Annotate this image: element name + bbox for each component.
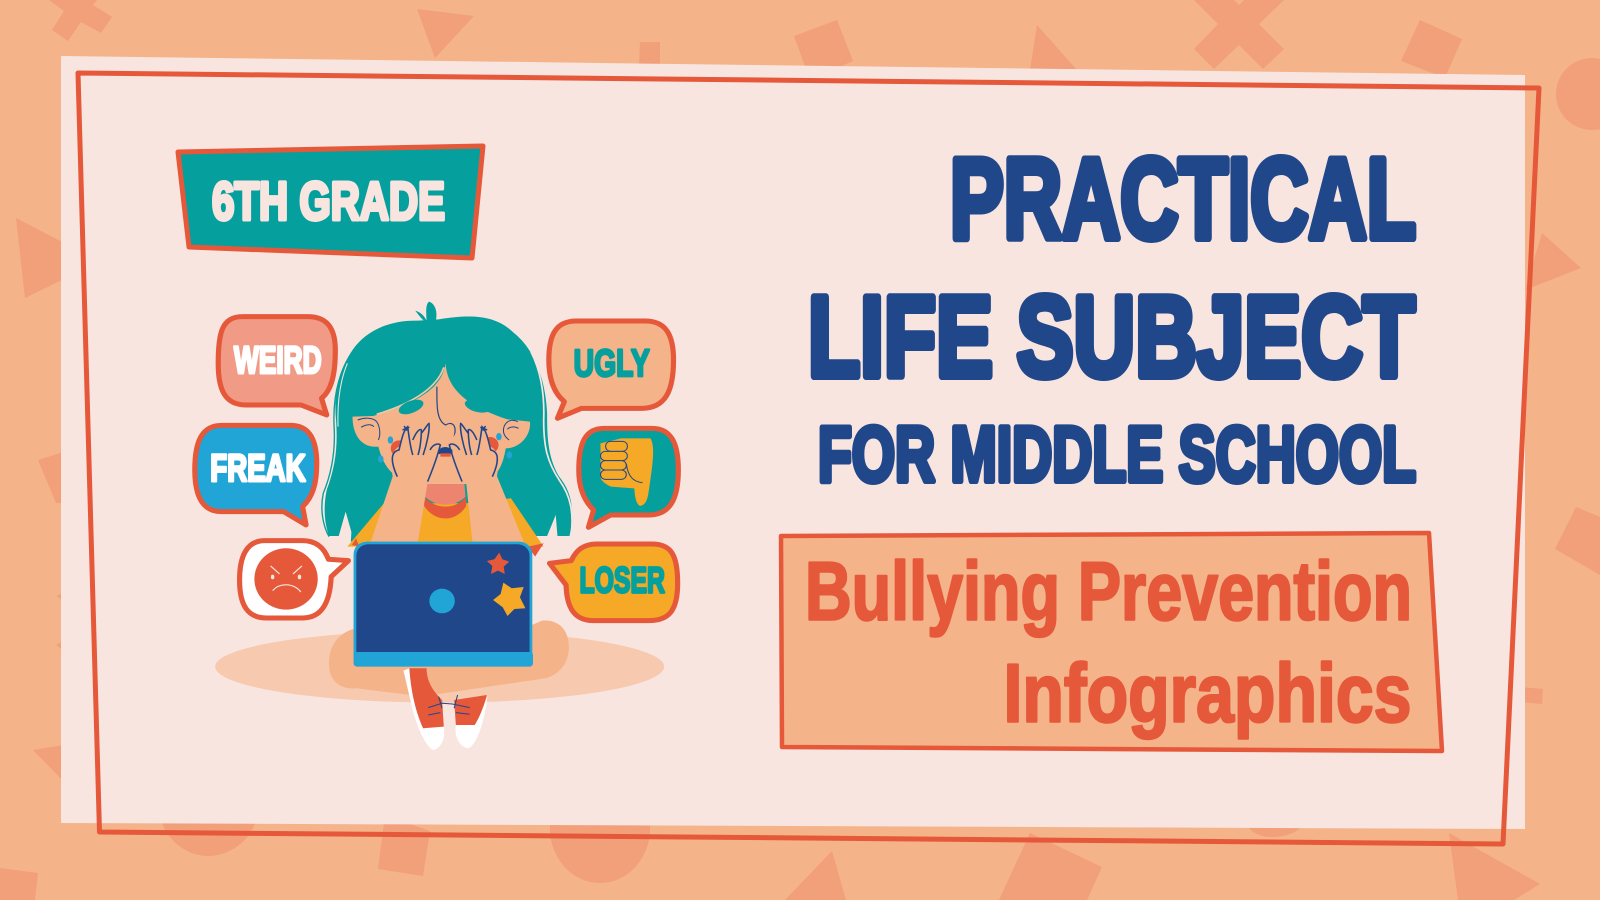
bubble: loser [550, 544, 678, 621]
cream panel [61, 56, 1525, 829]
bubble: ugly [549, 321, 674, 418]
face [353, 363, 530, 484]
subtitle box: Bullying Prevention [805, 544, 1412, 638]
bubble: freak: FREAK [210, 448, 306, 490]
grade badge: 6TH GRADE [212, 172, 445, 232]
collar [424, 484, 466, 518]
red sketch frame [78, 73, 1539, 844]
laptop [354, 542, 533, 667]
illustration: girl crying behind laptop with speech bubbles [195, 302, 678, 750]
arms [371, 475, 524, 542]
bubble: ugly: UGLY [574, 343, 650, 385]
title: practical life subject: PRACTICAL [950, 136, 1416, 263]
bubble: thumbs down [579, 428, 678, 527]
bubble: freak [195, 425, 317, 525]
subtitle box [781, 533, 1442, 751]
mouth [439, 447, 452, 457]
bubble: weird [218, 317, 335, 415]
icon: thumbs down [600, 438, 653, 506]
icon: angry face [254, 548, 318, 610]
bubble: angry face [240, 541, 348, 618]
right hand [449, 423, 498, 483]
shoes [404, 668, 488, 750]
title: practical life subject: LIFE SUBJECT [808, 274, 1415, 401]
crossed legs [329, 620, 569, 695]
subtitle box: Infographics [1004, 646, 1412, 740]
sleeve trim [352, 538, 544, 557]
tears [378, 433, 512, 463]
bubble: loser: LOSER [579, 560, 665, 601]
left hand [391, 423, 440, 483]
grade badge [178, 146, 483, 258]
floor shadow [215, 631, 664, 703]
shirt [347, 498, 544, 547]
bubble: weird: WEIRD [234, 340, 322, 382]
title: practical life subject [808, 136, 1416, 498]
hair [322, 302, 572, 542]
